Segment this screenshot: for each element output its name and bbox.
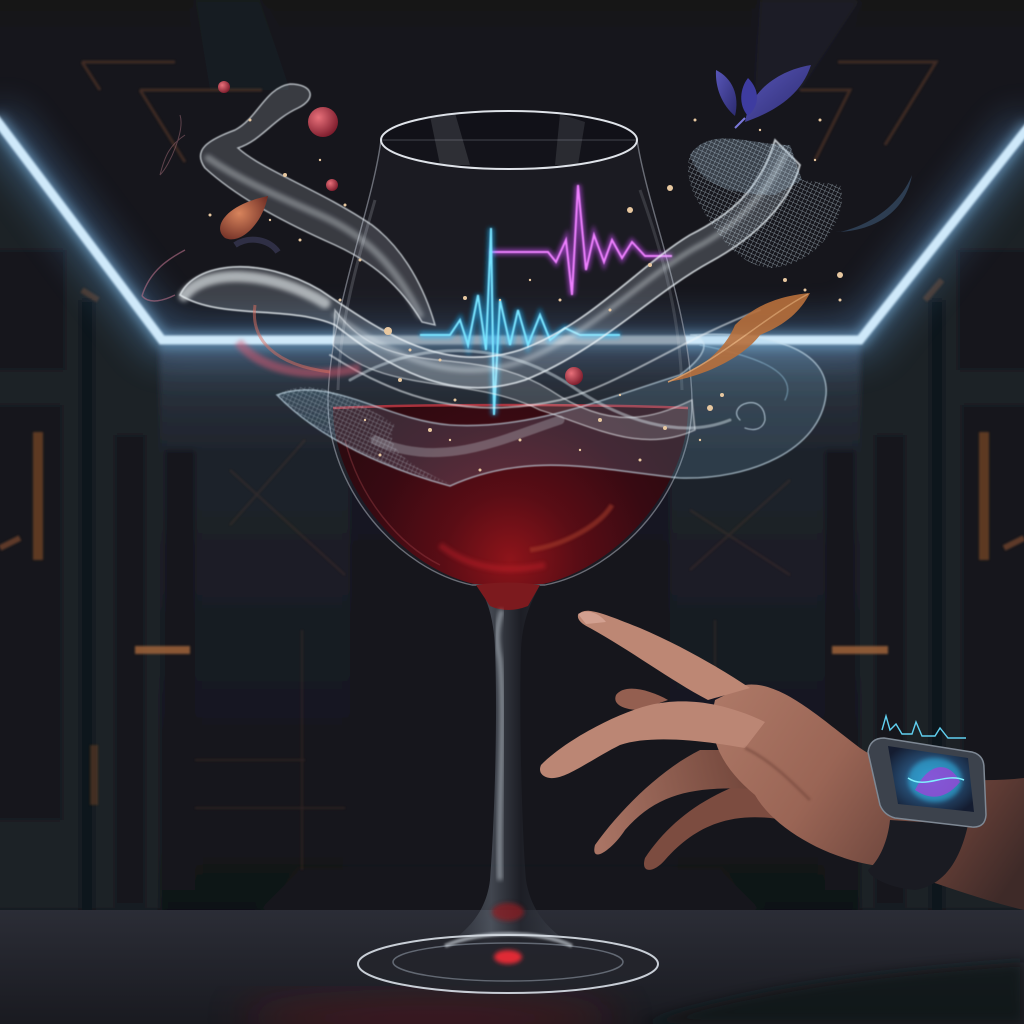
amber wall lights — [0, 62, 1024, 870]
hand — [540, 611, 1024, 910]
ribbon: crossing middle — [333, 310, 695, 440]
particles — [208, 118, 843, 472]
ring finger — [594, 750, 770, 854]
ribbon: main white — [180, 140, 800, 388]
red swirl left — [238, 305, 360, 373]
watch screen — [888, 746, 974, 812]
glass bowl — [328, 140, 692, 585]
mesh wave top right — [688, 138, 912, 268]
smartwatch — [868, 716, 986, 890]
stem — [450, 585, 568, 942]
glass rim — [381, 111, 637, 169]
holographic wave — [882, 716, 966, 738]
strap — [868, 820, 968, 890]
watch body — [868, 738, 986, 827]
upper strand highlight — [208, 158, 420, 315]
ribbon highlight — [184, 277, 325, 303]
middle finger — [540, 701, 765, 778]
table — [0, 910, 1024, 1024]
smoke ribbons — [180, 84, 826, 486]
neon ceiling lines — [0, 118, 1024, 340]
wine — [333, 405, 688, 584]
ribbon: lower right loop — [700, 345, 788, 400]
waveform: cyan — [420, 228, 620, 415]
curled finger — [615, 689, 668, 710]
feather right — [668, 293, 810, 382]
palm and wrist — [712, 685, 1024, 910]
leaves top right — [716, 65, 811, 128]
wine highlights — [345, 440, 612, 569]
index finger — [578, 611, 750, 700]
ribbon: upper left — [200, 84, 435, 325]
wine surface — [333, 405, 688, 408]
ribbon: wide lower blue — [277, 334, 826, 486]
wine glass — [328, 111, 692, 993]
foot — [358, 935, 658, 993]
little finger — [644, 775, 795, 870]
fruit and droplets — [142, 81, 583, 385]
waveform: magenta — [490, 185, 672, 295]
